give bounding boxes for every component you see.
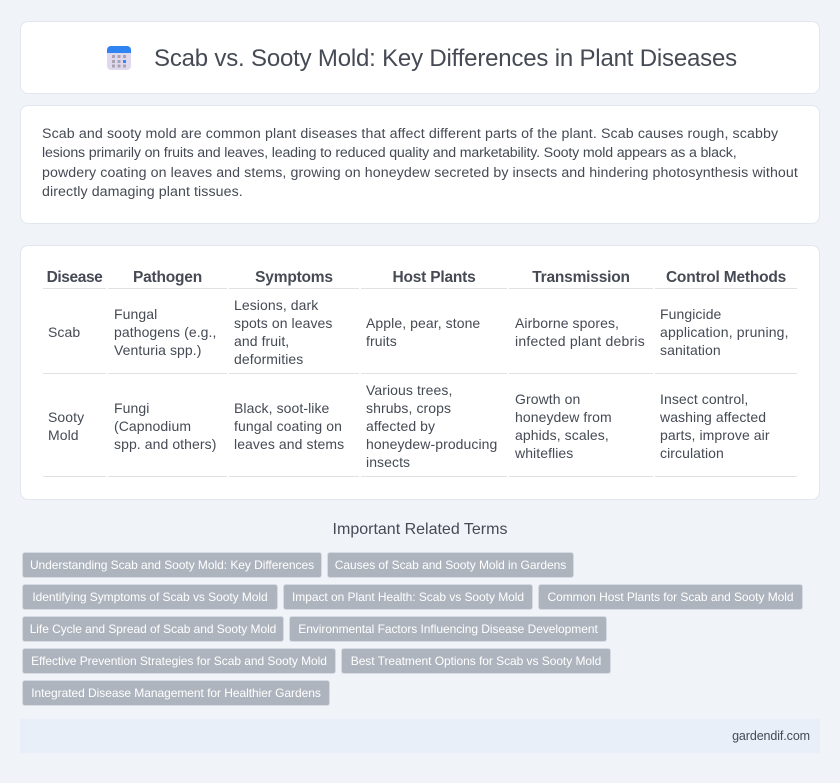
table row: Sooty Mold	[43, 382, 797, 477]
table row: Sooty Mold: (Capnodium	[114, 418, 191, 434]
table row: Sooty Mold: Various trees,	[366, 382, 452, 398]
table row: Sooty Mold: leaves and stems	[234, 436, 344, 452]
table row: Scab: sanitation	[660, 342, 721, 358]
related terms tags: Common Host Plants for Scab and Sooty Mold	[547, 590, 794, 604]
table row: Scab: Apple, pear, stone	[366, 315, 480, 331]
table row: Sooty Mold: honeydew-producing	[366, 436, 497, 452]
panel: header	[20, 21, 820, 94]
related terms tags: Environmental Factors Influencing Disease Development	[298, 622, 598, 636]
table row: Scab: spots on leaves	[234, 315, 332, 331]
footer bar	[20, 719, 820, 753]
table row: Scab: pathogens (e.g.,	[114, 324, 216, 340]
table header row: Host Plants	[392, 269, 476, 286]
related terms tags	[22, 552, 803, 706]
table header row: Control Methods	[666, 269, 786, 286]
panel: description	[20, 105, 820, 224]
text block: description: directly damaging plant tissues.	[42, 184, 243, 200]
related terms tags: Life Cycle and Spread of Scab and Sooty Mold	[30, 622, 276, 636]
table row: Scab: deformities	[234, 351, 303, 367]
related terms tags: Identifying Symptoms of Scab vs Sooty Mold	[32, 590, 268, 604]
table row: Scab: Fungicide	[660, 306, 721, 322]
table row: Scab: Scab	[48, 324, 80, 340]
table row: Scab: infected plant debris	[515, 333, 645, 349]
text block: description: lesions primarily on fruits and leaves, leading to reduced quality and marketability. Sooty mold appears as a black,	[42, 145, 736, 161]
related terms tags: Effective Prevention Strategies for Scab and Sooty Mold	[31, 654, 327, 668]
table row: Scab: and fruit,	[234, 333, 289, 349]
panel: comparison table	[20, 245, 820, 500]
table row: Sooty Mold: insects	[366, 454, 410, 470]
table header row: Pathogen	[133, 269, 202, 286]
heading: related terms: Important Related Terms	[333, 521, 507, 538]
table row: Sooty Mold: Sooty	[48, 409, 84, 425]
table row: Scab: Fungal	[114, 306, 157, 322]
table row: Sooty Mold: fungal coating on	[234, 418, 342, 434]
table row: Scab	[43, 297, 797, 374]
table row: Scab: Venturia spp.)	[114, 342, 202, 358]
table header row: Transmission	[532, 269, 630, 286]
table row: Sooty Mold: Fungi	[114, 400, 149, 416]
table row: Scab: Lesions, dark	[234, 297, 318, 313]
table header row: Disease	[47, 269, 102, 286]
text block: description: powdery coating on leaves and stems, growing on honeydew secreted by insects and hindering photosynthesis without	[42, 165, 798, 181]
related terms tags: Best Treatment Options for Scab vs Sooty Mold	[351, 654, 601, 668]
table row: Sooty Mold: parts, improve air	[660, 427, 770, 443]
text block: description: Scab and sooty mold are common plant diseases that affect different parts of the plant. Scab causes rough, scabby	[42, 126, 778, 142]
table row: Sooty Mold: Black, soot-like	[234, 400, 329, 416]
table header row: Symptoms	[255, 269, 333, 286]
table row: Sooty Mold: aphids, scales,	[515, 427, 609, 443]
table row: Scab: fruits	[366, 333, 397, 349]
text block: description	[42, 126, 798, 200]
table row: Sooty Mold: honeydew from	[515, 409, 612, 425]
table row: Sooty Mold: shrubs, crops	[366, 400, 451, 416]
table row: Sooty Mold: Growth on	[515, 391, 580, 407]
table row: Scab: application, pruning,	[660, 324, 789, 340]
related terms tags: Causes of Scab and Sooty Mold in Gardens	[335, 558, 566, 572]
title: Scab vs. Sooty Mold: Key Differences in Plant Diseases	[154, 45, 737, 72]
table row: Sooty Mold: circulation	[660, 445, 724, 461]
footer source text: gardendif.com	[732, 729, 810, 743]
table row: Sooty Mold: whiteflies	[515, 445, 573, 461]
table row: Sooty Mold: washing affected	[660, 409, 766, 425]
table row: Sooty Mold: Insect control,	[660, 391, 748, 407]
related terms tags: Impact on Plant Health: Scab vs Sooty Mold	[292, 590, 524, 604]
table row: Scab: Airborne spores,	[515, 315, 619, 331]
table header row	[43, 269, 797, 289]
table row: Sooty Mold: affected by	[366, 418, 435, 434]
table row: Sooty Mold: spp. and others)	[114, 436, 216, 452]
related terms tags: Understanding Scab and Sooty Mold: Key Differences	[30, 558, 314, 572]
related terms tags: Integrated Disease Management for Healthier Gardens	[31, 686, 321, 700]
icon: calendar	[107, 46, 131, 70]
table row: Sooty Mold: Mold	[48, 427, 79, 443]
